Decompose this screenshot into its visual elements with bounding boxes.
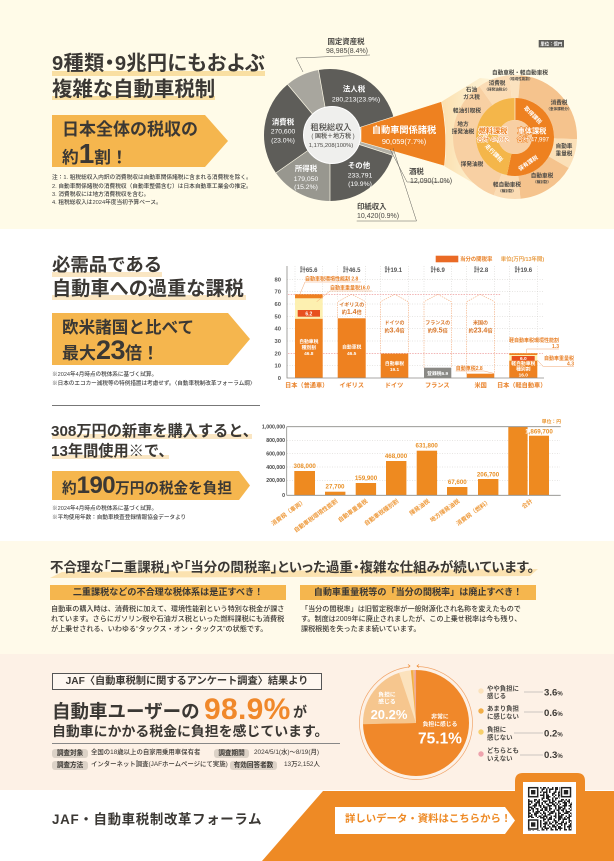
pie labels: 75.1% bbox=[418, 730, 462, 748]
rotated labels: 地方揮発油税 bbox=[428, 497, 461, 524]
axis ticks: 20 bbox=[275, 351, 281, 357]
detail labels: 自動車税・軽自動車税 bbox=[492, 68, 548, 76]
axis ticks: 600,000 bbox=[266, 452, 285, 458]
notes: 注：1. 租税総収入内訳の消費税収は自動車関係諸税に含まれる消費税を除く。 bbox=[52, 175, 252, 181]
detail labels: 消費税 bbox=[551, 98, 568, 106]
legend: いえない bbox=[487, 754, 513, 762]
detail labels: ガス税 bbox=[463, 93, 480, 101]
legend: に感じない bbox=[487, 712, 520, 720]
pie labels: (15.2%) bbox=[294, 184, 318, 191]
heading: excessive taxation: 必需品である bbox=[52, 254, 162, 275]
headline: 98.9% bbox=[204, 693, 291, 726]
chart: tax cost bars bbox=[262, 418, 561, 534]
button: more data: 詳しいデータ・資料はこちらから！ bbox=[345, 814, 511, 825]
unit box bbox=[539, 40, 564, 48]
notes: ※平均使用年数：自動車検査登録情報協会データより bbox=[52, 514, 186, 520]
body text: れています。さらにガソリン税や石油ガス税といった燃料課税にも消費税 bbox=[51, 615, 284, 623]
gridlines bbox=[287, 266, 544, 366]
pie labels: (19.9%) bbox=[348, 181, 372, 188]
survey details bbox=[52, 748, 320, 770]
comparison text bbox=[339, 302, 492, 334]
detail labels: （種別割） bbox=[533, 179, 551, 184]
legend: やや負担に bbox=[487, 684, 519, 692]
legend: 当分の間税率 bbox=[460, 255, 493, 263]
callout: up to 23 times bbox=[52, 313, 250, 365]
heading: nine kinds of auto tax: 9種類・9兆円にもおよぶ bbox=[52, 53, 265, 75]
category labels: フランス bbox=[425, 382, 450, 390]
chart: tax revenue pie: 燃料課税 bbox=[479, 126, 508, 136]
body text bbox=[301, 605, 521, 633]
axis ticks: 200,000 bbox=[266, 478, 285, 484]
button: more data bbox=[335, 807, 515, 834]
notes: 2. 自動車関係諸税の消費税収（自動車整備含む）は日本自動車工業会の推定。 bbox=[52, 184, 252, 190]
reference lines bbox=[288, 294, 543, 353]
callouts bbox=[300, 276, 574, 374]
pie labels: (23.0%) bbox=[271, 138, 295, 144]
slices bbox=[383, 690, 449, 756]
axis ticks: 50 bbox=[275, 314, 281, 320]
totals: 計19.1 bbox=[384, 266, 403, 274]
headline bbox=[52, 693, 328, 739]
headline: 自動車ユーザーの bbox=[52, 701, 200, 722]
callout: one tenth of tax revenue: 日本全体の税収の bbox=[62, 120, 198, 139]
heading: nine kinds of auto tax bbox=[52, 52, 265, 101]
ring labels: 保有課税 bbox=[517, 153, 540, 173]
values: 159,900 bbox=[355, 475, 378, 482]
survey details: 全国の18歳以上の自家用乗用車保有者 bbox=[91, 749, 200, 756]
detail labels: 地方 bbox=[457, 120, 469, 128]
chart: tax revenue pie: 1,175,208(100%) bbox=[309, 143, 353, 149]
comparison text: ドイツの bbox=[384, 320, 405, 326]
survey details: 有効回答者数 bbox=[234, 762, 273, 769]
chart: tax revenue pie: ( 国税＋地方税 ) bbox=[311, 132, 355, 140]
bars bbox=[295, 294, 537, 378]
subheading bbox=[300, 585, 536, 600]
headline: 自動車にかかる税金に負担を感じています。 bbox=[52, 723, 328, 739]
bars bbox=[294, 427, 549, 495]
chart: tax revenue pie: 酒税 bbox=[409, 167, 424, 176]
pie labels: 20.2% bbox=[371, 707, 408, 722]
axis ticks: 30 bbox=[275, 339, 281, 345]
unit box: 単位：億円 bbox=[540, 40, 563, 48]
axis ticks: 80 bbox=[275, 277, 281, 283]
legend: 3.6% bbox=[544, 688, 563, 698]
totals: 計19.6 bbox=[514, 266, 533, 274]
rotated labels: 自動車税環境性能割 bbox=[292, 497, 339, 534]
legend: 単位(万円/13年間) bbox=[501, 255, 544, 263]
bar text: 16.0 bbox=[519, 372, 528, 378]
values: 単位：円 bbox=[542, 418, 561, 425]
chart: survey pie bbox=[359, 664, 563, 780]
bar text: 46.5 bbox=[347, 351, 357, 357]
notes: ※2024年4月時点の税体系に基づく試算。 bbox=[52, 372, 157, 378]
gridlines bbox=[287, 440, 560, 480]
detail labels bbox=[452, 68, 573, 193]
detail labels: 消費税 bbox=[489, 79, 506, 87]
survey details: 調査対象 bbox=[57, 750, 83, 757]
detail labels: （揮発油税分） bbox=[484, 86, 510, 92]
category labels: 日本（軽自動車） bbox=[497, 382, 546, 390]
notes bbox=[52, 504, 186, 520]
pie labels: 280,213(23.9%) bbox=[332, 96, 380, 104]
callout: one tenth of tax revenue bbox=[52, 115, 228, 167]
detail labels: （種別割） bbox=[498, 188, 516, 193]
legend: 感じない bbox=[487, 732, 513, 742]
rotated labels: 揮発油税 bbox=[408, 497, 431, 517]
callout: up to 23 times: 最大23倍！ bbox=[62, 335, 159, 365]
legend: あまり負担 bbox=[487, 704, 520, 712]
callouts: 自動車税環境性能割 2.8 bbox=[305, 276, 359, 282]
survey details: インターネット調査(JAFホームページにて実施) bbox=[91, 761, 228, 768]
panel: footer bbox=[0, 790, 614, 861]
totals: 計46.5 bbox=[343, 266, 361, 274]
axis ticks: 60 bbox=[275, 302, 281, 308]
heading: nine kinds of auto tax: 複雑な自動車税制 bbox=[52, 79, 215, 101]
outside labels bbox=[296, 55, 450, 221]
callouts: 自動車税2.8 bbox=[456, 365, 483, 372]
detail labels: 軽自動車税 bbox=[493, 180, 521, 188]
pie labels: 負担に感じる bbox=[423, 720, 458, 728]
detail labels: 軽油引取税 bbox=[453, 106, 481, 114]
heading: excessive taxation: 自動車への過重な課税 bbox=[52, 278, 244, 300]
chart: tax revenue pie: 90,059(7.7%) bbox=[382, 137, 426, 146]
legend bbox=[436, 255, 544, 263]
rotated labels: 消費税（燃料） bbox=[455, 497, 492, 527]
forum name: JAF・自動車税制改革フォーラム bbox=[52, 812, 262, 827]
heading: double taxation: 不合理な「二重課税」や「当分の間税率」といった過重・複雑な仕組みが続いています。 bbox=[50, 560, 534, 574]
comparison text: 約1.4倍 bbox=[342, 309, 362, 316]
category labels: 米国 bbox=[475, 382, 487, 390]
survey title box bbox=[52, 673, 322, 690]
bar text: 自動車税 bbox=[385, 360, 404, 367]
survey details: 13万2,152人 bbox=[284, 761, 320, 768]
legend: 0.6% bbox=[544, 708, 563, 719]
callout: about 1.9 million yen: 約190万円の税金を負担 bbox=[62, 472, 232, 499]
comparison text: フランスの bbox=[425, 320, 450, 326]
comparison text: 約23.4倍 bbox=[469, 328, 492, 334]
values: 27,700 bbox=[326, 484, 345, 490]
totals: 計6.9 bbox=[431, 266, 446, 274]
survey details: 調査方法 bbox=[57, 762, 83, 769]
column: double taxation bbox=[50, 585, 286, 633]
values: 1,869,700 bbox=[525, 429, 553, 436]
bar text bbox=[299, 311, 535, 378]
category labels: 日本（普通車） bbox=[285, 382, 328, 390]
pie labels: 負担に bbox=[378, 690, 396, 698]
axis ticks bbox=[262, 425, 285, 499]
rotated labels: 自動車税種別割 bbox=[363, 497, 400, 527]
orange footer shape bbox=[262, 773, 614, 861]
panel: JAF survey bbox=[0, 654, 614, 790]
house outlines bbox=[338, 294, 494, 374]
chart: tax revenue pie: 合計 42,062 bbox=[477, 136, 510, 144]
chart: tax revenue pie: 10,420(0.9%) bbox=[357, 213, 399, 220]
axis ticks: 70 bbox=[275, 290, 281, 296]
chart: tax revenue pie: 12,090(1.0%) bbox=[410, 178, 452, 185]
axis ticks: 40 bbox=[275, 327, 281, 333]
category labels bbox=[285, 382, 546, 390]
pie labels: 非常に bbox=[431, 712, 449, 720]
values: 468,000 bbox=[385, 453, 408, 460]
chart: tax revenue pie: 98,985(8.4%) bbox=[326, 48, 368, 55]
bar text: 46.8 bbox=[304, 351, 314, 357]
chart: tax revenue pie: 固定資産税 bbox=[328, 37, 365, 46]
legend: 負担に bbox=[487, 724, 506, 734]
ring labels: 取得課税 bbox=[522, 104, 544, 126]
chart: tax revenue pie bbox=[264, 37, 577, 222]
callouts: 4.3 bbox=[567, 362, 574, 368]
survey title box: JAF〈自動車税制に関するアンケート調査〉結果より bbox=[66, 676, 308, 687]
zoom band to detail pie bbox=[441, 78, 500, 190]
detail labels: 揮発油税 bbox=[461, 160, 484, 168]
values: 308,000 bbox=[294, 463, 316, 470]
callouts: 自動車重量税16.0 bbox=[330, 284, 370, 292]
pie labels: 感じる bbox=[378, 698, 396, 706]
detail labels: 自動車 bbox=[556, 142, 573, 150]
comparison text: 約9.5倍 bbox=[428, 328, 448, 334]
pie labels: 233,791 bbox=[348, 172, 372, 180]
detail labels: 重量税 bbox=[556, 150, 573, 158]
values bbox=[294, 418, 561, 490]
notes: ※2024年4月時点の税体系に基づく試算。 bbox=[52, 506, 157, 512]
bar text: 種別割 bbox=[516, 366, 531, 373]
callouts: 軽自動車税環境性能割 bbox=[509, 337, 559, 344]
axis ticks bbox=[275, 277, 281, 382]
column: provisional rate bbox=[300, 585, 536, 633]
values: 67,600 bbox=[448, 479, 467, 486]
axis ticks: 1,000,000 bbox=[262, 425, 285, 431]
heading: purchase of new car: 308万円の新車を購入すると、 bbox=[51, 423, 258, 440]
bar text: 6.0 bbox=[520, 356, 527, 362]
axis ticks: 10 bbox=[275, 364, 281, 370]
legend: 0.3% bbox=[544, 750, 563, 761]
rotated labels: 自動車重量税 bbox=[336, 497, 369, 524]
legend: 0.2% bbox=[544, 728, 563, 740]
QR code bbox=[523, 782, 576, 834]
detail labels: （環境性能割） bbox=[507, 76, 533, 81]
pie labels: 法人税 bbox=[343, 84, 366, 94]
callout: one tenth of tax revenue: 約1割！ bbox=[62, 138, 128, 169]
pie labels bbox=[271, 84, 380, 191]
ring labels: 走行課税 bbox=[483, 142, 505, 164]
detail labels: 自動車税 bbox=[531, 172, 554, 180]
heading: purchase of new car: 13年間使用※で、 bbox=[51, 443, 174, 460]
comparison text: 約3.4倍 bbox=[385, 328, 404, 334]
bar text: 19.1 bbox=[390, 367, 399, 373]
chart: tax revenue pie: 車体課税 bbox=[518, 126, 547, 136]
axis bbox=[287, 266, 544, 378]
chart: tax revenue pie: 印紙収入 bbox=[357, 202, 387, 211]
body text: 「当分の間税率」は旧暫定税率が一般財源化され名称を変えたもので bbox=[301, 605, 521, 613]
body text: 課税根拠を失ったまま続いています。 bbox=[301, 625, 420, 633]
axis ticks: 0 bbox=[278, 376, 281, 382]
legend: どちらとも bbox=[487, 746, 519, 754]
values: 1,869,700 bbox=[525, 429, 553, 436]
body text bbox=[51, 604, 284, 633]
totals: 計65.6 bbox=[300, 266, 318, 274]
headline: が bbox=[293, 704, 307, 720]
subheading bbox=[50, 585, 286, 600]
pie labels bbox=[371, 690, 462, 748]
notes: 4. 租税総収入は2024年度当初予算ベース。 bbox=[52, 200, 162, 206]
legend: 感じる bbox=[487, 691, 506, 700]
subheading: 二重課税などの不合理な税体系は是正すべき！ bbox=[73, 587, 263, 597]
pie labels: 179,050 bbox=[294, 176, 318, 183]
totals: 計2.8 bbox=[474, 266, 489, 274]
values: 206,700 bbox=[477, 472, 500, 478]
body text: 自動車の購入時は、消費税に加えて、環境性能割という特別な税金が課さ bbox=[51, 605, 284, 613]
ring bbox=[358, 665, 474, 781]
panel: unreasonable tax structure bbox=[0, 541, 614, 654]
pie labels: 270,600 bbox=[271, 128, 295, 136]
bar text: 種別割 bbox=[302, 344, 316, 351]
callouts: 自動車重量税 bbox=[544, 355, 574, 362]
notes: 3. 消費税収には地方消費税収を含む。 bbox=[52, 192, 149, 198]
axis ticks: 0 bbox=[282, 493, 285, 499]
detail labels: 揮発油税 bbox=[452, 128, 475, 136]
subheading: 自動車重量税等の「当分の間税率」は廃止すべき！ bbox=[314, 587, 522, 597]
chart: tax revenue pie: 租税総収入 bbox=[311, 122, 351, 132]
detail labels: （車体課税分） bbox=[546, 106, 572, 111]
notes bbox=[52, 174, 252, 206]
survey details: 調査期間 bbox=[218, 750, 245, 757]
pie slices bbox=[284, 89, 376, 181]
callout: up to 23 times: 欧米諸国と比べて bbox=[62, 318, 194, 337]
bar text: 自動車税 bbox=[342, 343, 361, 350]
ring labels bbox=[483, 104, 544, 173]
values: 631,800 bbox=[416, 442, 438, 450]
body text: す。制度は2009年に廃止されましたが、この上乗せ税率は今も残り、 bbox=[301, 615, 521, 623]
chart: international comparison bars bbox=[274, 255, 574, 390]
body text: が上乗せされる、いわゆる“タックス・オン・タックス”の状態です。 bbox=[51, 625, 267, 633]
comparison text: イギリスの bbox=[339, 302, 364, 308]
totals bbox=[300, 266, 533, 274]
detail labels: 石油 bbox=[466, 86, 477, 94]
notes: ※日本のエコカー減税等の特例措置は考慮せず。〈自動車税制改革フォーラム調〉 bbox=[52, 380, 255, 386]
category labels: イギリス bbox=[339, 382, 364, 390]
rotated labels bbox=[270, 497, 534, 534]
survey details: 2024/5/1(水)～8/19(月) bbox=[254, 749, 319, 756]
bar text: 自動車税 bbox=[299, 338, 319, 345]
heading: purchase of new car bbox=[51, 422, 258, 460]
heading: excessive taxation bbox=[52, 254, 246, 300]
pie labels: 所得税 bbox=[295, 164, 318, 173]
detail pie bbox=[445, 67, 585, 207]
panel: tax structure bbox=[0, 0, 614, 229]
axis ticks: 400,000 bbox=[266, 465, 285, 471]
axis bbox=[287, 427, 561, 495]
legend bbox=[478, 684, 563, 762]
rotated labels: 合計 bbox=[520, 497, 534, 510]
panel: comparison and purchase cost bbox=[51, 255, 574, 532]
notes bbox=[52, 370, 255, 386]
comparison text: 米国の bbox=[473, 320, 488, 326]
callouts: 1.3 bbox=[552, 344, 559, 350]
category labels: ドイツ bbox=[385, 382, 403, 390]
pie labels: その他 bbox=[348, 161, 371, 170]
chart: tax revenue pie: 自動車関係諸税 bbox=[372, 124, 437, 135]
pie labels: 消費税 bbox=[272, 118, 295, 126]
bar text: 6.2 bbox=[305, 311, 312, 317]
chart: tax revenue pie: 合計 47,997 bbox=[517, 136, 550, 144]
rotated labels: 消費税（車両） bbox=[270, 497, 307, 527]
wedge: auto related taxes bbox=[361, 102, 446, 166]
bar text: 軽自動車税 bbox=[511, 360, 535, 367]
bar text: 登録税6.9 bbox=[427, 370, 449, 377]
axis ticks: 800,000 bbox=[266, 438, 285, 444]
